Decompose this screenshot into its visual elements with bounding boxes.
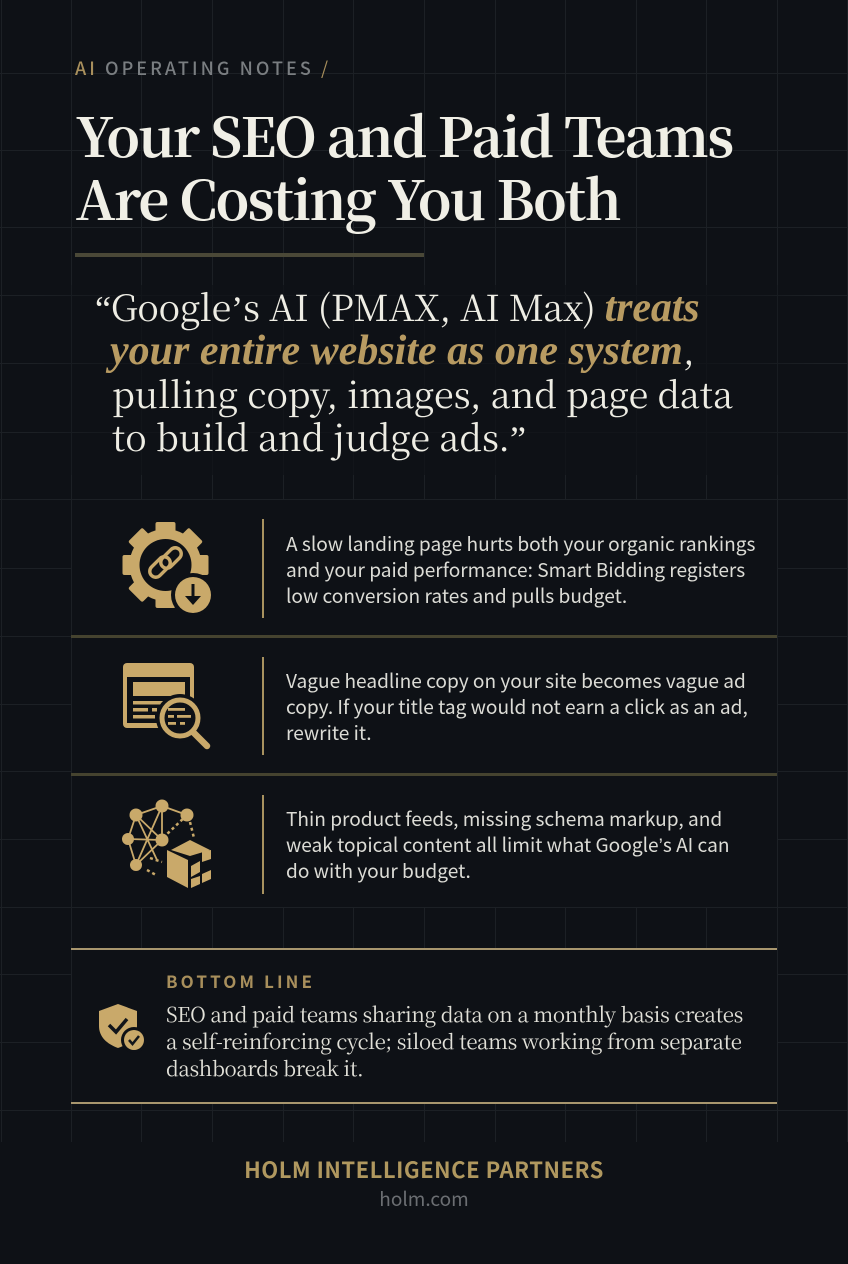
icon: gear with link and download: [122, 522, 211, 613]
text: rewrite it.: [286, 718, 372, 746]
bottom line text: [166, 998, 743, 1082]
text: and your paid performance: Smart Bidding registers: [286, 555, 745, 583]
divider: [71, 773, 777, 776]
text: copy. If your title tag would not earn a click as an ad,: [286, 692, 748, 720]
panel: row 1: [122, 519, 755, 618]
eyebrow label: AI OPERATING NOTES /: [75, 55, 331, 81]
divider: [71, 635, 777, 638]
bottom line label: BOTTOM LINE: [166, 968, 315, 993]
separator: [262, 519, 264, 618]
text: [286, 666, 748, 746]
bottom line text: a self-reinforcing cycle; siloed teams working from separate: [166, 1025, 742, 1055]
bottom rule: [71, 1102, 777, 1104]
text: [286, 529, 755, 609]
icon: shield check: [99, 1004, 144, 1050]
pull quote: “Google’s AI (PMAX, AI Max) treats: [95, 281, 699, 332]
icon: browser with magnifier: [123, 663, 210, 750]
text: A slow landing page hurts both your organic rankings: [286, 529, 755, 557]
footer brand: HOLM INTELLIGENCE PARTNERS: [244, 1153, 604, 1185]
text: Thin product feeds, missing schema markup, and: [286, 804, 722, 832]
bottom line text: SEO and paid teams sharing data on a monthly basis creates: [166, 998, 743, 1028]
separator: [262, 795, 264, 894]
text: weak topical content all limit what Google’s AI can: [286, 830, 729, 858]
pull quote: [95, 281, 733, 462]
title: Your SEO and Paid Teams: [76, 96, 733, 173]
title: [76, 96, 733, 236]
text: [286, 804, 729, 884]
panel: bottom line: [71, 948, 777, 1104]
text: do with your budget.: [286, 856, 471, 884]
title: Are Costing You Both: [76, 159, 620, 236]
text: low conversion rates and pulls budget.: [286, 581, 627, 609]
icon: network and cube: [122, 800, 211, 888]
pull quote: to build and judge ads.”: [112, 411, 526, 462]
pull quote: your entire website as one system,: [110, 324, 695, 375]
text: Vague headline copy on your site becomes vague ad: [286, 666, 746, 694]
pull quote: pulling copy, images, and page data: [112, 368, 733, 419]
bottom line text: dashboards break it.: [166, 1052, 363, 1082]
separator: [262, 657, 264, 755]
top rule: [71, 948, 777, 950]
panel: row 3: [122, 795, 729, 894]
panel: row 2: [123, 657, 748, 755]
title rule: [75, 253, 424, 257]
footer url: holm.com: [379, 1185, 469, 1212]
